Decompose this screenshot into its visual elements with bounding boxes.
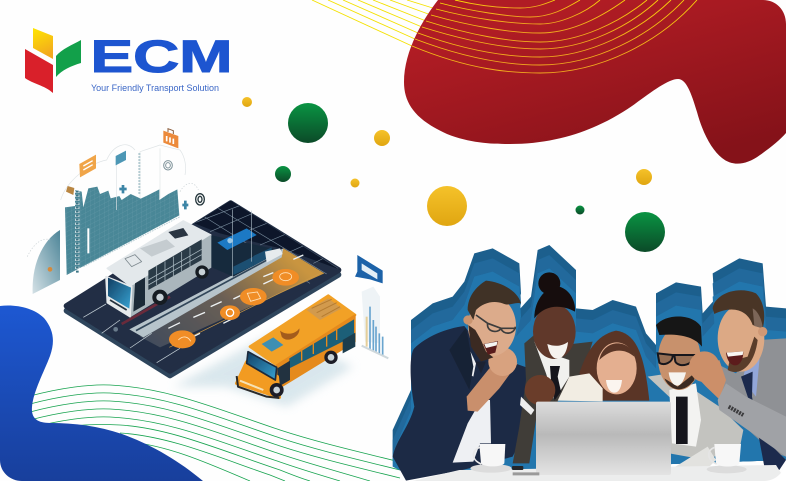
- logo: [25, 28, 232, 94]
- icon: orange card: [79, 155, 96, 177]
- coffee cup right: [707, 444, 747, 473]
- small bar chart: [362, 287, 388, 358]
- tablet lines: [83, 304, 180, 363]
- tablet: [67, 201, 341, 375]
- blue blob: [0, 306, 203, 481]
- tablet grid: [190, 201, 341, 283]
- person: man in light grey suit: [648, 316, 743, 470]
- person: man in grey suit: [689, 290, 786, 470]
- ghost bus section: [210, 209, 283, 277]
- rounded corner masks: [764, 459, 786, 481]
- person: woman in dark suit: [513, 272, 593, 463]
- icon: plus marks: [119, 185, 188, 209]
- logo wordmark: ECM: [90, 31, 232, 82]
- white bus: [106, 221, 211, 317]
- dot on quarter: [48, 267, 52, 272]
- icon: blue tile: [116, 151, 126, 165]
- table: [413, 465, 786, 481]
- icon: small box: [66, 186, 74, 195]
- coffee cup left: [470, 444, 512, 473]
- icon: grey fingerprint: [164, 161, 172, 170]
- person: man in navy suit: [393, 281, 531, 481]
- blue brush background: [393, 245, 786, 473]
- icon: chat bubble: [355, 255, 383, 283]
- quarter circle: [33, 230, 60, 294]
- decorative dots: [242, 97, 665, 252]
- curb: [129, 248, 283, 337]
- icon: dark fingerprint: [196, 194, 204, 205]
- yellow contour lines: left of red shape: [312, 0, 436, 46]
- orange bus: [237, 296, 355, 398]
- shadow: [120, 333, 353, 407]
- route marker discs: [169, 269, 299, 348]
- logo icon: [25, 28, 81, 93]
- team photo: [393, 245, 786, 481]
- laptop: [512, 402, 671, 475]
- yellow contour lines over red shape: [412, 0, 697, 73]
- person: woman in white blazer: [558, 331, 649, 401]
- icon: orange bag: [163, 129, 178, 148]
- red blob: [404, 0, 786, 164]
- tagline: Your Friendly Transport Solution: [91, 83, 219, 94]
- data chart: [27, 145, 198, 275]
- transport illustration: [27, 129, 388, 407]
- road: [140, 248, 324, 347]
- green contour lines: [30, 385, 400, 481]
